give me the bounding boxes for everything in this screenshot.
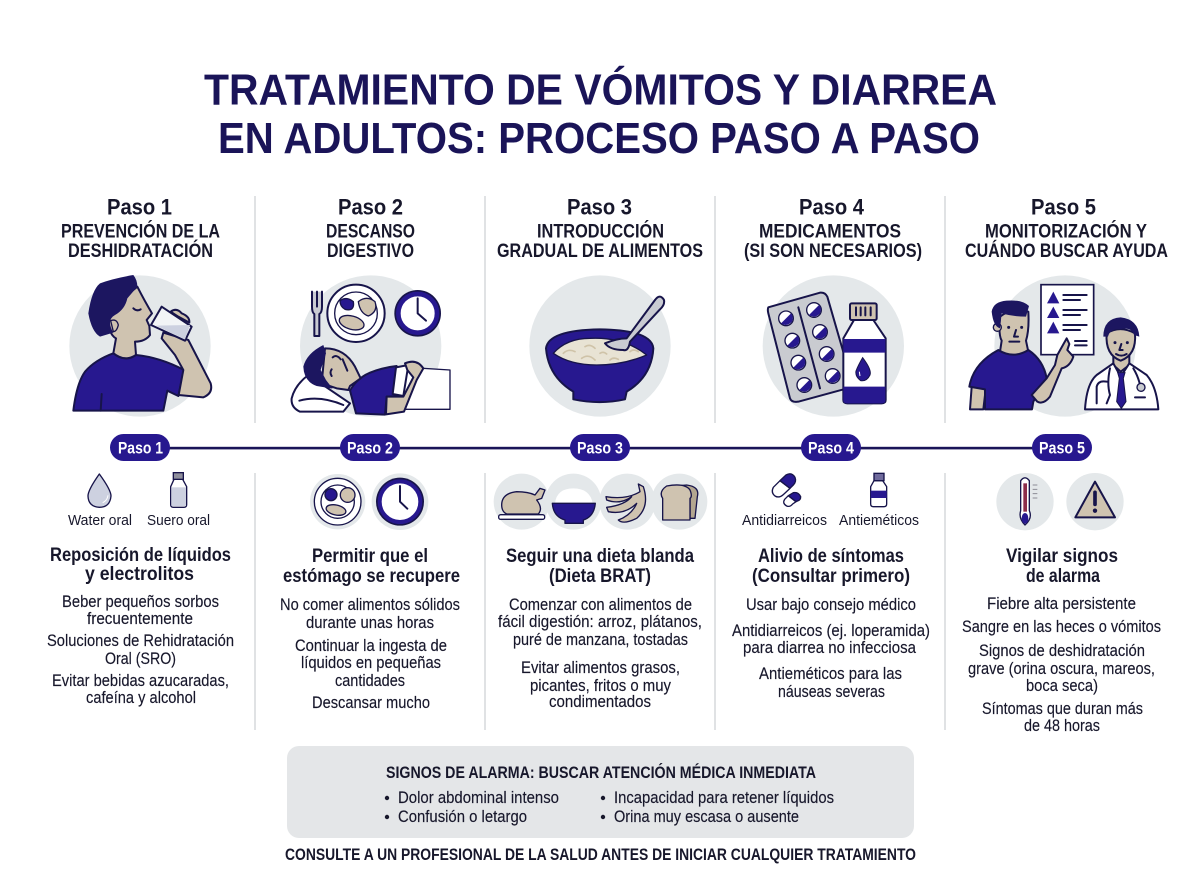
text block: paso 5: de alarma bbox=[1026, 565, 1100, 587]
text block: paso 2: líquidos en pequeñas bbox=[301, 653, 441, 672]
heading: paso 1: PREVENCIÓN DE LA bbox=[61, 220, 220, 242]
text block: paso 1 bbox=[47, 544, 234, 707]
heading: paso 5: Paso 5 bbox=[1031, 194, 1096, 220]
heading: paso 3 bbox=[497, 194, 703, 262]
heading: paso 5: CUÁNDO BUSCAR AYUDA bbox=[965, 240, 1168, 262]
text block: paso 2: Permitir que el bbox=[312, 545, 428, 567]
text block: paso 4 bbox=[732, 545, 930, 701]
text block: paso 3: fácil digestión: arroz, plátanos, bbox=[498, 612, 702, 631]
text block: paso 5: Signos de deshidratación bbox=[979, 641, 1145, 660]
text block: paso 4: Antieméticos para las bbox=[759, 664, 902, 683]
icon: advertencia bbox=[1066, 473, 1124, 530]
footer note: CONSULTE A UN PROFESIONAL DE LA SALUD ANTES DE INICIAR CUALQUIER TRATAMIENTO bbox=[285, 846, 916, 864]
heading: paso 5 bbox=[965, 194, 1168, 262]
heading: paso 3: GRADUAL DE ALIMENTOS bbox=[497, 241, 703, 262]
text block: paso 5: grave (orina oscura, mareos, bbox=[968, 659, 1155, 678]
text block: paso 3: puré de manzana, tostadas bbox=[513, 630, 688, 649]
text block: paso 1: Evitar bebidas azucaradas, bbox=[52, 671, 229, 690]
text block: paso 5: de 48 horas bbox=[1024, 716, 1100, 735]
illustration: hombre bebiendo agua bbox=[69, 275, 211, 417]
text block: paso 1: y electrolitos bbox=[85, 563, 194, 585]
text block: paso 3: Comenzar con alimentos de bbox=[509, 595, 692, 614]
heading: paso 4 bbox=[744, 194, 922, 262]
heading: paso 3: INTRODUCCIÓN bbox=[537, 220, 664, 242]
pill: paso 1: Paso 1 bbox=[118, 440, 163, 458]
text block: paso 5: Vigilar signos bbox=[1006, 545, 1118, 567]
text block: paso 3: Seguir una dieta blanda bbox=[506, 545, 694, 567]
illustration: tazón de avena bbox=[529, 275, 671, 417]
panel: signos de alarma bbox=[287, 746, 914, 838]
text block: paso 2: Continuar la ingesta de bbox=[295, 636, 447, 655]
panel: signos de alarma: Dolor abdominal intenso bbox=[398, 788, 559, 807]
pill: paso 2 bbox=[340, 434, 400, 461]
text block: paso 2: Descansar mucho bbox=[312, 693, 430, 712]
timeline bbox=[110, 434, 1092, 461]
text block: paso 4: Alivio de síntomas bbox=[758, 545, 904, 567]
text block: paso 5 bbox=[962, 545, 1161, 735]
heading: paso 2: DIGESTIVO bbox=[327, 241, 414, 262]
text block: paso 4: Usar bajo consejo médico bbox=[746, 595, 916, 614]
text block: paso 2: durante unas horas bbox=[306, 613, 434, 632]
label: agua y suero bbox=[68, 512, 210, 529]
pill: paso 3 bbox=[570, 434, 630, 461]
heading: paso 1: Paso 1 bbox=[107, 194, 172, 220]
icon: frasco antiemético bbox=[871, 473, 887, 507]
heading: paso 2: Paso 2 bbox=[338, 194, 403, 220]
icon: termómetro bbox=[996, 473, 1054, 530]
text block: paso 1: Oral (SRO) bbox=[105, 649, 176, 668]
text block: paso 1: frecuentemente bbox=[87, 609, 193, 628]
label: medicamentos: Antidiarreicos bbox=[742, 512, 827, 529]
icon: pollo bbox=[494, 474, 550, 530]
text block: paso 4: Antidiarreicos (ej. loperamida) bbox=[732, 621, 930, 640]
text block: paso 2: cantidades bbox=[335, 671, 405, 690]
icon: botella de suero bbox=[171, 473, 187, 507]
panel: signos de alarma: Orina muy escasa o ausente bbox=[614, 807, 799, 826]
panel: signos de alarma: SIGNOS DE ALARMA: BUSCAR ATENCIÓN MÉDICA INMEDIATA bbox=[386, 763, 816, 782]
label: agua y suero: Water oral bbox=[68, 512, 132, 529]
panel: signos de alarma: Confusión o letargo bbox=[398, 807, 527, 826]
text block: paso 4: (Consultar primero) bbox=[752, 565, 910, 587]
heading: paso 2: DESCANSO bbox=[326, 222, 415, 242]
text block: paso 5: Síntomas que duran más bbox=[982, 699, 1143, 718]
icon: arroz bbox=[545, 474, 601, 530]
heading: paso 3: Paso 3 bbox=[567, 194, 632, 220]
text block: paso 3: (Dieta BRAT) bbox=[549, 565, 651, 587]
text block: paso 1: cafeína y alcohol bbox=[86, 688, 196, 707]
pill: paso 5: Paso 5 bbox=[1039, 440, 1085, 458]
label: medicamentos: Antieméticos bbox=[839, 512, 919, 529]
icon: gota de agua bbox=[88, 474, 111, 507]
pill: paso 3: Paso 3 bbox=[577, 440, 623, 458]
heading: paso 4: MEDICAMENTOS bbox=[759, 222, 901, 242]
text block: paso 5: Sangre en las heces o vómitos bbox=[962, 617, 1161, 636]
illustration: descanso digestivo bbox=[292, 275, 450, 417]
pill: paso 5 bbox=[1032, 434, 1092, 461]
pill: paso 1 bbox=[110, 434, 170, 461]
icon: reloj pequeño bbox=[372, 473, 428, 530]
title bbox=[204, 64, 997, 163]
icon: pan bbox=[651, 474, 707, 530]
text block: paso 1: Reposición de líquidos bbox=[50, 544, 231, 566]
label: medicamentos bbox=[742, 512, 919, 529]
panel: signos de alarma: Incapacidad para retener líquidos bbox=[614, 788, 834, 807]
icon: plato pequeño bbox=[310, 474, 365, 529]
heading: paso 1 bbox=[61, 194, 220, 262]
heading: paso 4: (SI SON NECESARIOS) bbox=[744, 241, 922, 262]
text block: paso 3: condimentados bbox=[549, 692, 651, 711]
label: agua y suero: Suero oral bbox=[147, 512, 210, 529]
text block: paso 2: estómago se recupere bbox=[283, 565, 460, 587]
text block: paso 4: para diarrea no infecciosa bbox=[743, 638, 916, 657]
pill: paso 4 bbox=[801, 434, 861, 461]
text block: paso 3: Evitar alimentos grasos, bbox=[521, 658, 680, 677]
pill: paso 4: Paso 4 bbox=[808, 440, 855, 458]
text block: paso 3 bbox=[498, 545, 702, 711]
title: TRATAMIENTO DE VÓMITOS Y DIARREA bbox=[204, 64, 997, 114]
text block: paso 3: picantes, fritos o muy bbox=[530, 676, 671, 695]
text block: paso 2 bbox=[280, 545, 460, 712]
illustration: paciente y médico bbox=[969, 275, 1158, 417]
text block: paso 1: Beber pequeños sorbos bbox=[62, 592, 219, 611]
text block: paso 5: Fiebre alta persistente bbox=[987, 594, 1136, 613]
heading: paso 5: MONITORIZACIÓN Y bbox=[985, 220, 1147, 242]
text block: paso 2: No comer alimentos sólidos bbox=[280, 595, 460, 614]
text block: paso 4: náuseas severas bbox=[778, 682, 885, 701]
heading: paso 1: DESHIDRATACIÓN bbox=[68, 240, 213, 262]
icon: plátanos bbox=[599, 474, 655, 530]
heading: paso 2 bbox=[326, 194, 415, 262]
text block: paso 5: boca seca) bbox=[1026, 676, 1098, 695]
heading: paso 4: Paso 4 bbox=[799, 194, 865, 220]
illustration: medicamentos bbox=[763, 275, 904, 417]
text block: paso 1: Soluciones de Rehidratación bbox=[47, 631, 234, 650]
title: EN ADULTOS: PROCESO PASO A PASO bbox=[218, 115, 980, 163]
pill: paso 2: Paso 2 bbox=[347, 440, 393, 458]
icon: cápsulas bbox=[772, 474, 801, 506]
